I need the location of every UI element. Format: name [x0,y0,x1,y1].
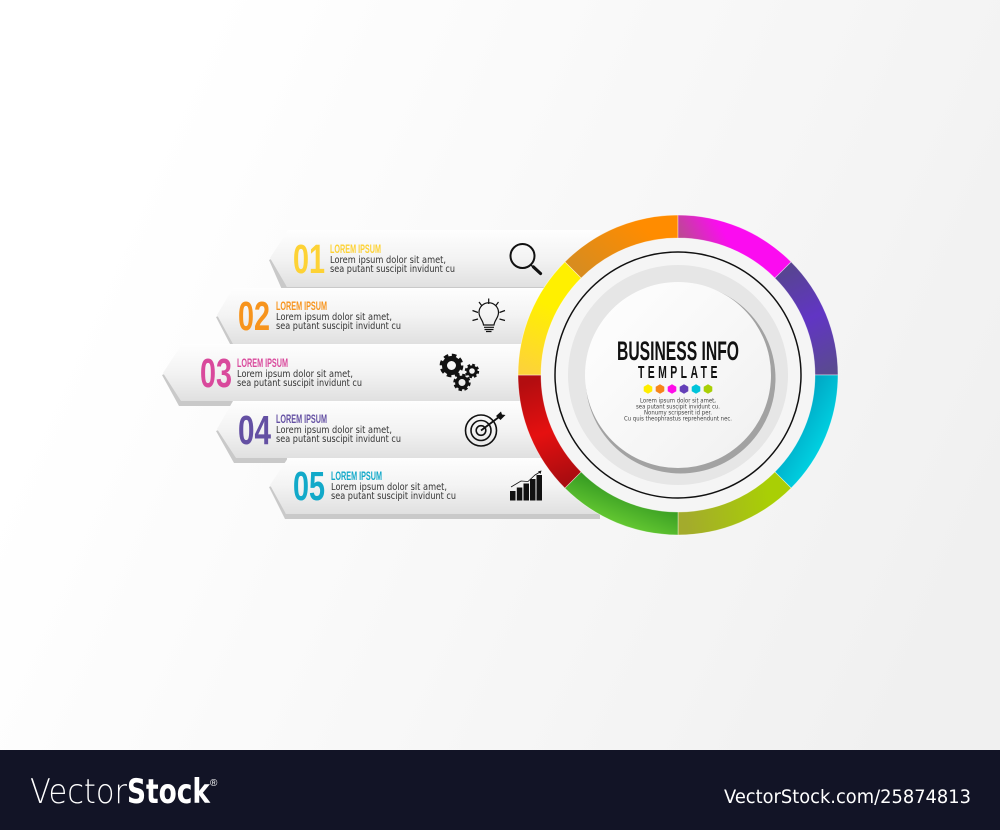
icon: target [466,412,506,446]
ribbon 5 [269,458,600,519]
colour hexagons [644,384,712,394]
footer logo bold: Stock [127,772,211,812]
icon: bar chart [510,470,542,500]
black outline circle [555,252,801,498]
label 03 [237,356,362,389]
label 02: Lorem ipsum dolor sit amet, [276,312,392,323]
label 05: sea putant suscipit invidunt cu [331,491,456,502]
icon: magnifier [510,244,540,274]
label 05: Lorem ipsum dolor sit amet, [331,482,447,493]
centre text [624,398,732,422]
ring segments [518,215,838,535]
number 04: 04 [238,407,271,453]
disc shadow [586,284,776,474]
label 01: LOREM IPSUM [330,242,381,256]
centre text: Cu quis theophrastus reprehendunt nec. [624,416,732,422]
number 05: 05 [293,463,325,509]
centre text: sea putant suscipit invidunt cu. [636,404,720,410]
label 04 [276,412,401,445]
label 03: Lorem ipsum dolor sit amet, [237,369,353,380]
label 02 [276,299,401,332]
label 01: Lorem ipsum dolor sit amet, [330,255,446,266]
label 02: LOREM IPSUM [276,299,327,313]
label 05: LOREM IPSUM [331,469,382,483]
label 02: sea putant suscipit invidunt cu [276,321,401,332]
label 01: sea putant suscipit invidunt cu [330,264,455,275]
footer logo: Vector [30,772,127,812]
ribbon 3 [162,344,560,406]
footer bar [0,750,1000,830]
ribbon 4 [216,401,560,463]
label 01 [330,242,455,275]
number 01: 01 [293,236,325,282]
registered mark: ® [210,778,218,789]
grey ring [568,265,788,485]
centre text: Lorem ipsum dolor sit amet, [640,398,716,404]
footer id: VectorStock.com/25874813 [724,786,971,808]
title: BUSINESS INFO [617,336,739,366]
label 04: Lorem ipsum dolor sit amet, [276,425,392,436]
circular diagram [518,215,838,535]
label 04: LOREM IPSUM [276,412,327,426]
label 04: sea putant suscipit invidunt cu [276,434,401,445]
icon: gears [441,355,478,390]
subtitle: TEMPLATE [638,363,721,383]
number 03: 03 [200,350,232,396]
icon: light bulb [472,298,505,332]
ring base [540,237,816,513]
ribbon 2 [216,288,560,344]
label 05 [331,469,456,502]
centre text: Nonumy scripserit id per. [644,410,712,416]
ribbon 1 [269,230,600,292]
number 02: 02 [238,293,270,339]
white disc [585,282,771,468]
label 03: LOREM IPSUM [237,356,288,370]
label 03: sea putant suscipit invidunt cu [237,378,362,389]
